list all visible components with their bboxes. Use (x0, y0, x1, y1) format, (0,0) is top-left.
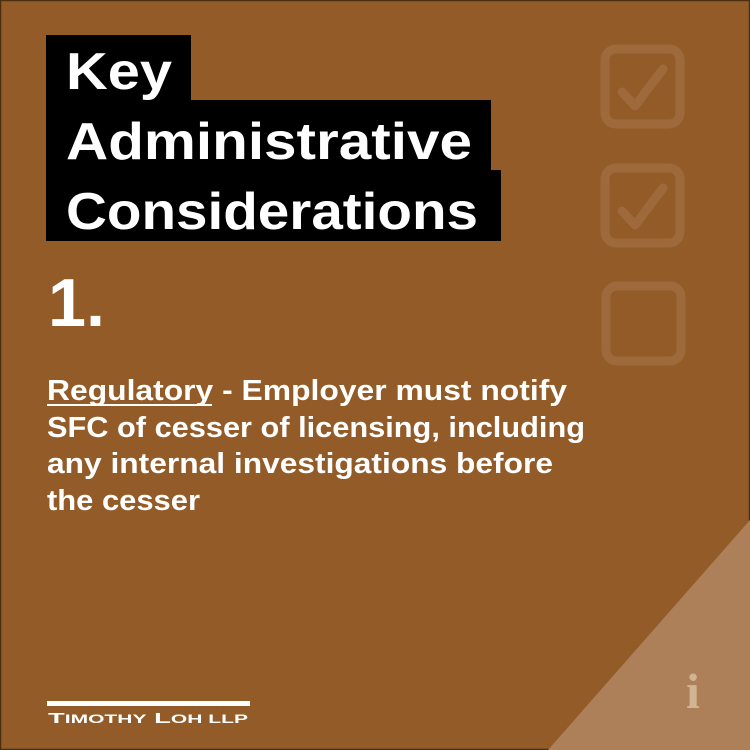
title: Administrative (66, 113, 472, 171)
corner triangle (548, 520, 750, 750)
logo: Timothy Loh LLP: T IMOTHY L OH LLP (48, 710, 249, 727)
number heading: 1. (48, 265, 105, 341)
icon: info i: i (686, 663, 700, 719)
body text: SFC of cesser of licensing, including (47, 412, 585, 444)
checkbox icons (605, 49, 681, 361)
icon: checked box 2 (605, 168, 680, 243)
title: Considerations (66, 183, 478, 241)
logo: Timothy Loh LLP (47, 701, 250, 727)
body text: the cesser (47, 485, 200, 517)
body text: any internal investigations before (47, 448, 553, 480)
title: Key (66, 43, 172, 101)
icon: empty box 3 (606, 286, 681, 361)
icon: checked box 1 (605, 49, 680, 124)
title (46, 35, 501, 241)
body text (47, 375, 585, 517)
body text: Regulatory - Employer must notify (47, 375, 567, 407)
